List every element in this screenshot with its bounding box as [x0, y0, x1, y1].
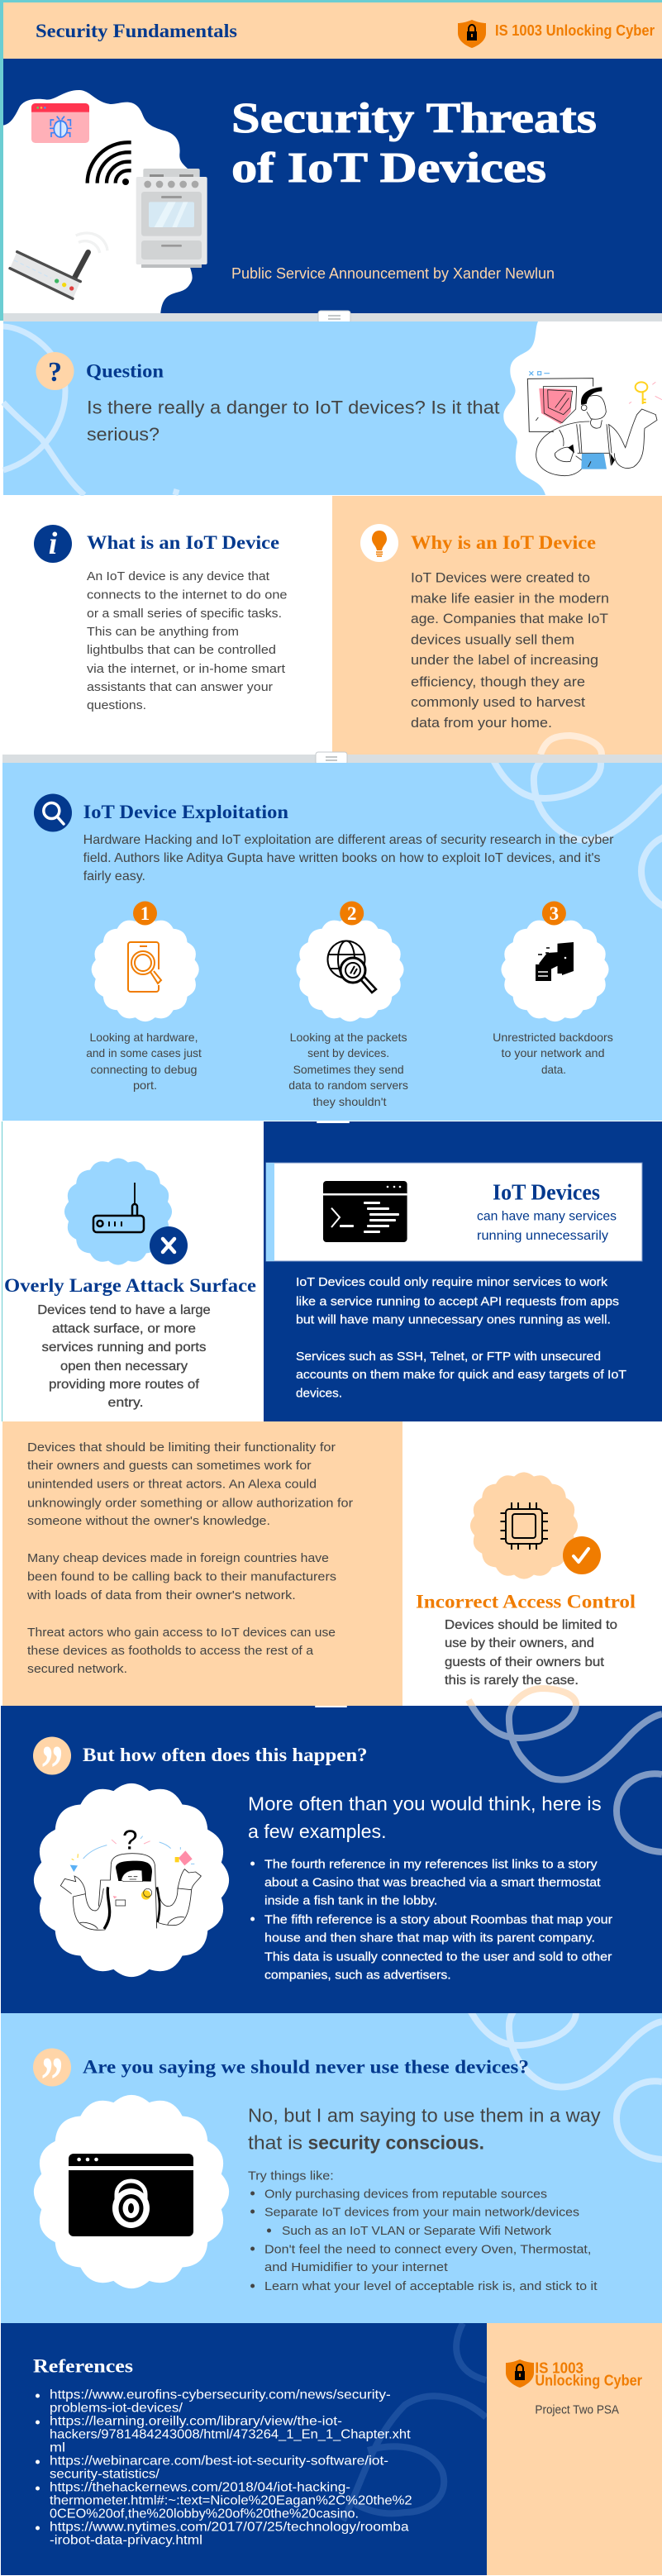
panel: footer logo [487, 2323, 662, 2575]
reference list: https://webinarcare.com/best-iot-security-software/iot- [50, 2455, 388, 2469]
panel: incorrect access control [417, 1472, 636, 1706]
caption: Sometimes they send [293, 1063, 404, 1076]
bullet list: The fourth reference in my references list links to a story [264, 1858, 598, 1872]
lead text: security conscious. [307, 2132, 484, 2154]
hero illustration [3, 90, 207, 313]
hero title: Security Threats [231, 95, 597, 142]
panel: access control text: unknowingly order something or allow authorization for [27, 1496, 353, 1510]
hero panel [3, 59, 662, 313]
body text: guests of their owners but [445, 1655, 605, 1669]
icon: info [34, 525, 72, 563]
icon: terminal window [323, 1181, 407, 1242]
body text: Devices should be limited to [445, 1618, 617, 1632]
icon: globe with magnifier [327, 940, 376, 993]
question text [87, 397, 499, 445]
panel: access control text: Many cheap devices made in foreign countries have [27, 1551, 329, 1565]
bullet list: inside a fish tank in the lobby. [264, 1894, 437, 1908]
lead text: that is [248, 2132, 302, 2154]
body text: data from your home. [411, 715, 552, 731]
reference list: 0CEO%20of,the%20lobby%20of%20the%20casino. [50, 2507, 359, 2521]
reference list: hackers/9781484243008/html/473264_1_En_1_Chapter.xht [50, 2428, 411, 2442]
hero title [231, 95, 597, 192]
reference list: thermometer.html#:~:text=Nicole%20Eagan%2C%20the%2 [50, 2494, 412, 2508]
step 3: backdoors: 3 [550, 903, 559, 924]
body text: or a small series of specific tasks. [87, 607, 282, 621]
body text [296, 1275, 626, 1401]
advice list: and Humidifier to your internet [264, 2260, 449, 2274]
heading: Why is an IoT Device [411, 532, 596, 553]
reference list: ml [50, 2441, 65, 2455]
body text: questions. [87, 698, 146, 712]
illustration: astronaut in blob [34, 1783, 229, 1977]
caption: they shouldn't [312, 1095, 387, 1108]
lead text: More often than you would think, here is [248, 1793, 602, 1815]
header bar [3, 2, 662, 59]
icon: magnifier [34, 793, 72, 831]
heading: Overly Large Attack Surface [4, 1275, 256, 1296]
panel: question [3, 321, 662, 495]
body text: attack surface, or more [52, 1322, 196, 1336]
body text: entry. [107, 1396, 144, 1410]
panel: access control text: Threat actors who gain access to IoT devices can use [27, 1626, 336, 1640]
panel: access control text: been found to be calling back to their manufacturers [27, 1570, 336, 1584]
bullet list: The fifth reference is a story about Roombas that map your [264, 1913, 612, 1927]
icon: quote: ” [41, 2045, 63, 2117]
icon: browser with lock in blob [34, 2095, 229, 2288]
caption: sent by devices. [307, 1046, 389, 1059]
body text: Services such as SSH, Telnet, or FTP with unsecured [296, 1350, 601, 1364]
caption: data. [541, 1063, 566, 1076]
panel: access control text: unintended users or threat actors. An Alexa could [27, 1478, 317, 1492]
body text: Devices tend to have a large [37, 1303, 211, 1317]
heading: Incorrect Access Control [416, 1592, 636, 1612]
panel: IoT device exploitation [2, 749, 662, 1121]
icon: question mark [36, 352, 74, 390]
reference list: https://www.eurofins-cybersecurity.com/news/security- [50, 2388, 391, 2402]
hero title: of IoT Devices [231, 145, 546, 192]
panel: how often [1, 1688, 662, 2013]
caption: Looking at hardware, [89, 1031, 198, 1044]
body text: efficiency, though they are [411, 674, 585, 689]
advice list [248, 2169, 598, 2293]
reference list [36, 2388, 412, 2548]
icon: info: i [49, 526, 58, 561]
panel: never use these devices [1, 1996, 662, 2323]
callout text [477, 1210, 617, 1243]
body text: age. Companies that make IoT [411, 611, 608, 626]
panel: references [1, 2323, 487, 2575]
caption: Unrestricted backdoors [493, 1031, 613, 1044]
body text: this is rarely the case. [445, 1674, 579, 1688]
lead text: No, but I am saying to use them in a way [248, 2105, 601, 2126]
body text: under the label of increasing [411, 652, 598, 668]
body text: devices. [296, 1387, 342, 1401]
callout heading: IoT Devices [493, 1180, 600, 1205]
step 2: packets: 2 [347, 903, 356, 924]
question heading: Question [86, 360, 164, 382]
body text: but will have many unnecessary ones running as well. [296, 1312, 611, 1326]
icon: browser with bug [31, 103, 89, 143]
body text [87, 569, 288, 712]
body text: open then necessary [60, 1359, 188, 1374]
icon: router [10, 233, 107, 299]
illustration: person with shield and key [503, 321, 662, 495]
icon: shield logo [458, 20, 486, 48]
body text: use by their owners, and [445, 1636, 594, 1650]
heading: IoT Device Exploitation [83, 802, 288, 822]
body text: services running and ports [41, 1340, 207, 1355]
body text: make life easier in the modern [411, 590, 609, 607]
bullet list: companies, such as advertisers. [264, 1969, 451, 1983]
body text: lightbulbs that can be controlled [87, 643, 276, 657]
icon: router in blob [64, 1158, 188, 1265]
body text: This can be anything from [87, 625, 239, 639]
caption: to your network and [501, 1046, 605, 1059]
callout text: running unnecessarily [477, 1229, 608, 1243]
lead text: a few examples. [248, 1821, 387, 1842]
panel: access control text: secured network. [27, 1662, 127, 1676]
reference list: https://www.nytimes.com/2017/07/25/technology/roomba [50, 2521, 409, 2535]
icon: chip in blob [470, 1472, 601, 1579]
intro text: field. Authors like Aditya Gupta have written books on how to exploit IoT devices, and it's [83, 851, 601, 865]
caption [288, 1031, 408, 1108]
reference list: https://learning.oreilly.com/library/view/the-iot- [50, 2415, 342, 2429]
heading: References [33, 2356, 133, 2377]
logo text [535, 2360, 642, 2389]
advice list: Don't feel the need to connect every Oven, Thermostat, [264, 2242, 591, 2256]
body text: like a service running to accept API requests from apps [296, 1294, 619, 1308]
step 1: hardware: 1 [140, 903, 150, 924]
body text [445, 1618, 617, 1688]
panel: access control text: someone without the owner's knowledge. [27, 1514, 270, 1528]
advice list: Separate IoT devices from your main network/devices [264, 2205, 579, 2219]
panel: IoT devices services [264, 1121, 662, 1421]
body text: connects to the internet to do one [87, 588, 288, 602]
icon: light bulb [360, 524, 398, 562]
heading: But how often does this happen? [83, 1745, 368, 1765]
bullet list: house and then share that map with its parent company. [264, 1931, 595, 1945]
body text: accounts on them make for quick and easy targets of IoT [296, 1368, 626, 1382]
reference list: https://thehackernews.com/2018/04/iot-hacking- [50, 2481, 350, 2495]
body text: providing more routes of [49, 1378, 200, 1392]
project label: Project Two PSA [535, 2403, 619, 2417]
logo text: Unlocking Cyber [535, 2373, 642, 2389]
panel: access control text: with loads of data from their owner's network. [26, 1588, 296, 1602]
lead text [248, 1793, 602, 1842]
step 3: backdoors [493, 901, 613, 1076]
advice list: Learn what your level of acceptable risk is, and stick to it [264, 2279, 598, 2293]
panel: access control text: their owners and guests can sometimes work for [27, 1459, 312, 1473]
body text [37, 1303, 211, 1410]
body text: via the internet, or in-home smart [87, 662, 286, 676]
reference list: -irobot-data-privacy.html [50, 2534, 202, 2548]
lead text [248, 2105, 601, 2154]
question text: serious? [87, 424, 160, 445]
caption [493, 1031, 613, 1076]
intro text: fairly easy. [83, 869, 145, 883]
bullet list [250, 1858, 612, 1983]
icon: quote: ” [41, 1733, 63, 1806]
body text [411, 569, 609, 731]
advice list: Only purchasing devices from reputable sources [264, 2187, 547, 2201]
caption: connecting to debug [91, 1063, 197, 1076]
panel: access control text: Devices that should be limiting their functionality for [27, 1440, 336, 1455]
panel: access control text: these devices as footholds to access the rest of a [27, 1644, 314, 1658]
body text: IoT Devices were created to [411, 569, 590, 585]
intro text [83, 833, 614, 883]
panel: why is an IoT device [332, 496, 662, 755]
caption: Looking at the packets [290, 1031, 407, 1044]
bullet list: This data is usually connected to the user and sold to other [264, 1950, 612, 1964]
advice list: Try things like: [248, 2169, 334, 2183]
callout text: can have many services [477, 1210, 617, 1224]
body text: IoT Devices could only require minor services to work [296, 1275, 608, 1289]
illustration: astronaut in blob: ? [122, 1825, 138, 1855]
icon: wifi signal [88, 142, 131, 185]
caption: and in some cases just [86, 1046, 202, 1059]
caption: port. [133, 1078, 157, 1092]
panel: access control text [2, 1421, 402, 1706]
reference list: security-statistics/ [50, 2468, 160, 2482]
teal page edge [0, 0, 662, 321]
body text: An IoT device is any device that [87, 569, 270, 583]
caption [86, 1031, 202, 1092]
step 1: hardware [86, 901, 202, 1092]
hero byline: Public Service Announcement by Xander Newlun [231, 265, 555, 282]
caption: data to random servers [288, 1078, 408, 1092]
logo text: IS 1003 [535, 2360, 583, 2377]
callout box [266, 1163, 642, 1261]
panel: what is an IoT device [0, 496, 332, 755]
icon: phone with magnifier [128, 942, 161, 992]
question text: Is there really a danger to IoT devices? Is it that [87, 397, 499, 418]
heading: What is an IoT Device [87, 532, 279, 553]
body text: commonly used to harvest [411, 694, 585, 710]
icon: shield logo [506, 2359, 534, 2388]
intro text: Hardware Hacking and IoT exploitation are different areas of security research in the cyber [83, 833, 614, 847]
bullet list: about a Casino that was breached via a smart thermostat [264, 1876, 601, 1890]
advice list: Such as an IoT VLAN or Separate Wifi Network [282, 2224, 552, 2238]
step 2: packets [288, 901, 408, 1108]
icon: door and hand [536, 942, 574, 981]
header title: Security Fundamentals [36, 21, 237, 41]
panel: overly large attack surface [2, 1121, 264, 1421]
icon: question mark: ? [48, 357, 62, 388]
heading: Are you saying we should never use these devices? [83, 2056, 529, 2077]
reference list: problems-iot-devices/ [50, 2402, 183, 2416]
body text: devices usually sell them [411, 631, 574, 648]
icon: oven [136, 169, 207, 268]
body text: assistants that can answer your [87, 680, 273, 694]
